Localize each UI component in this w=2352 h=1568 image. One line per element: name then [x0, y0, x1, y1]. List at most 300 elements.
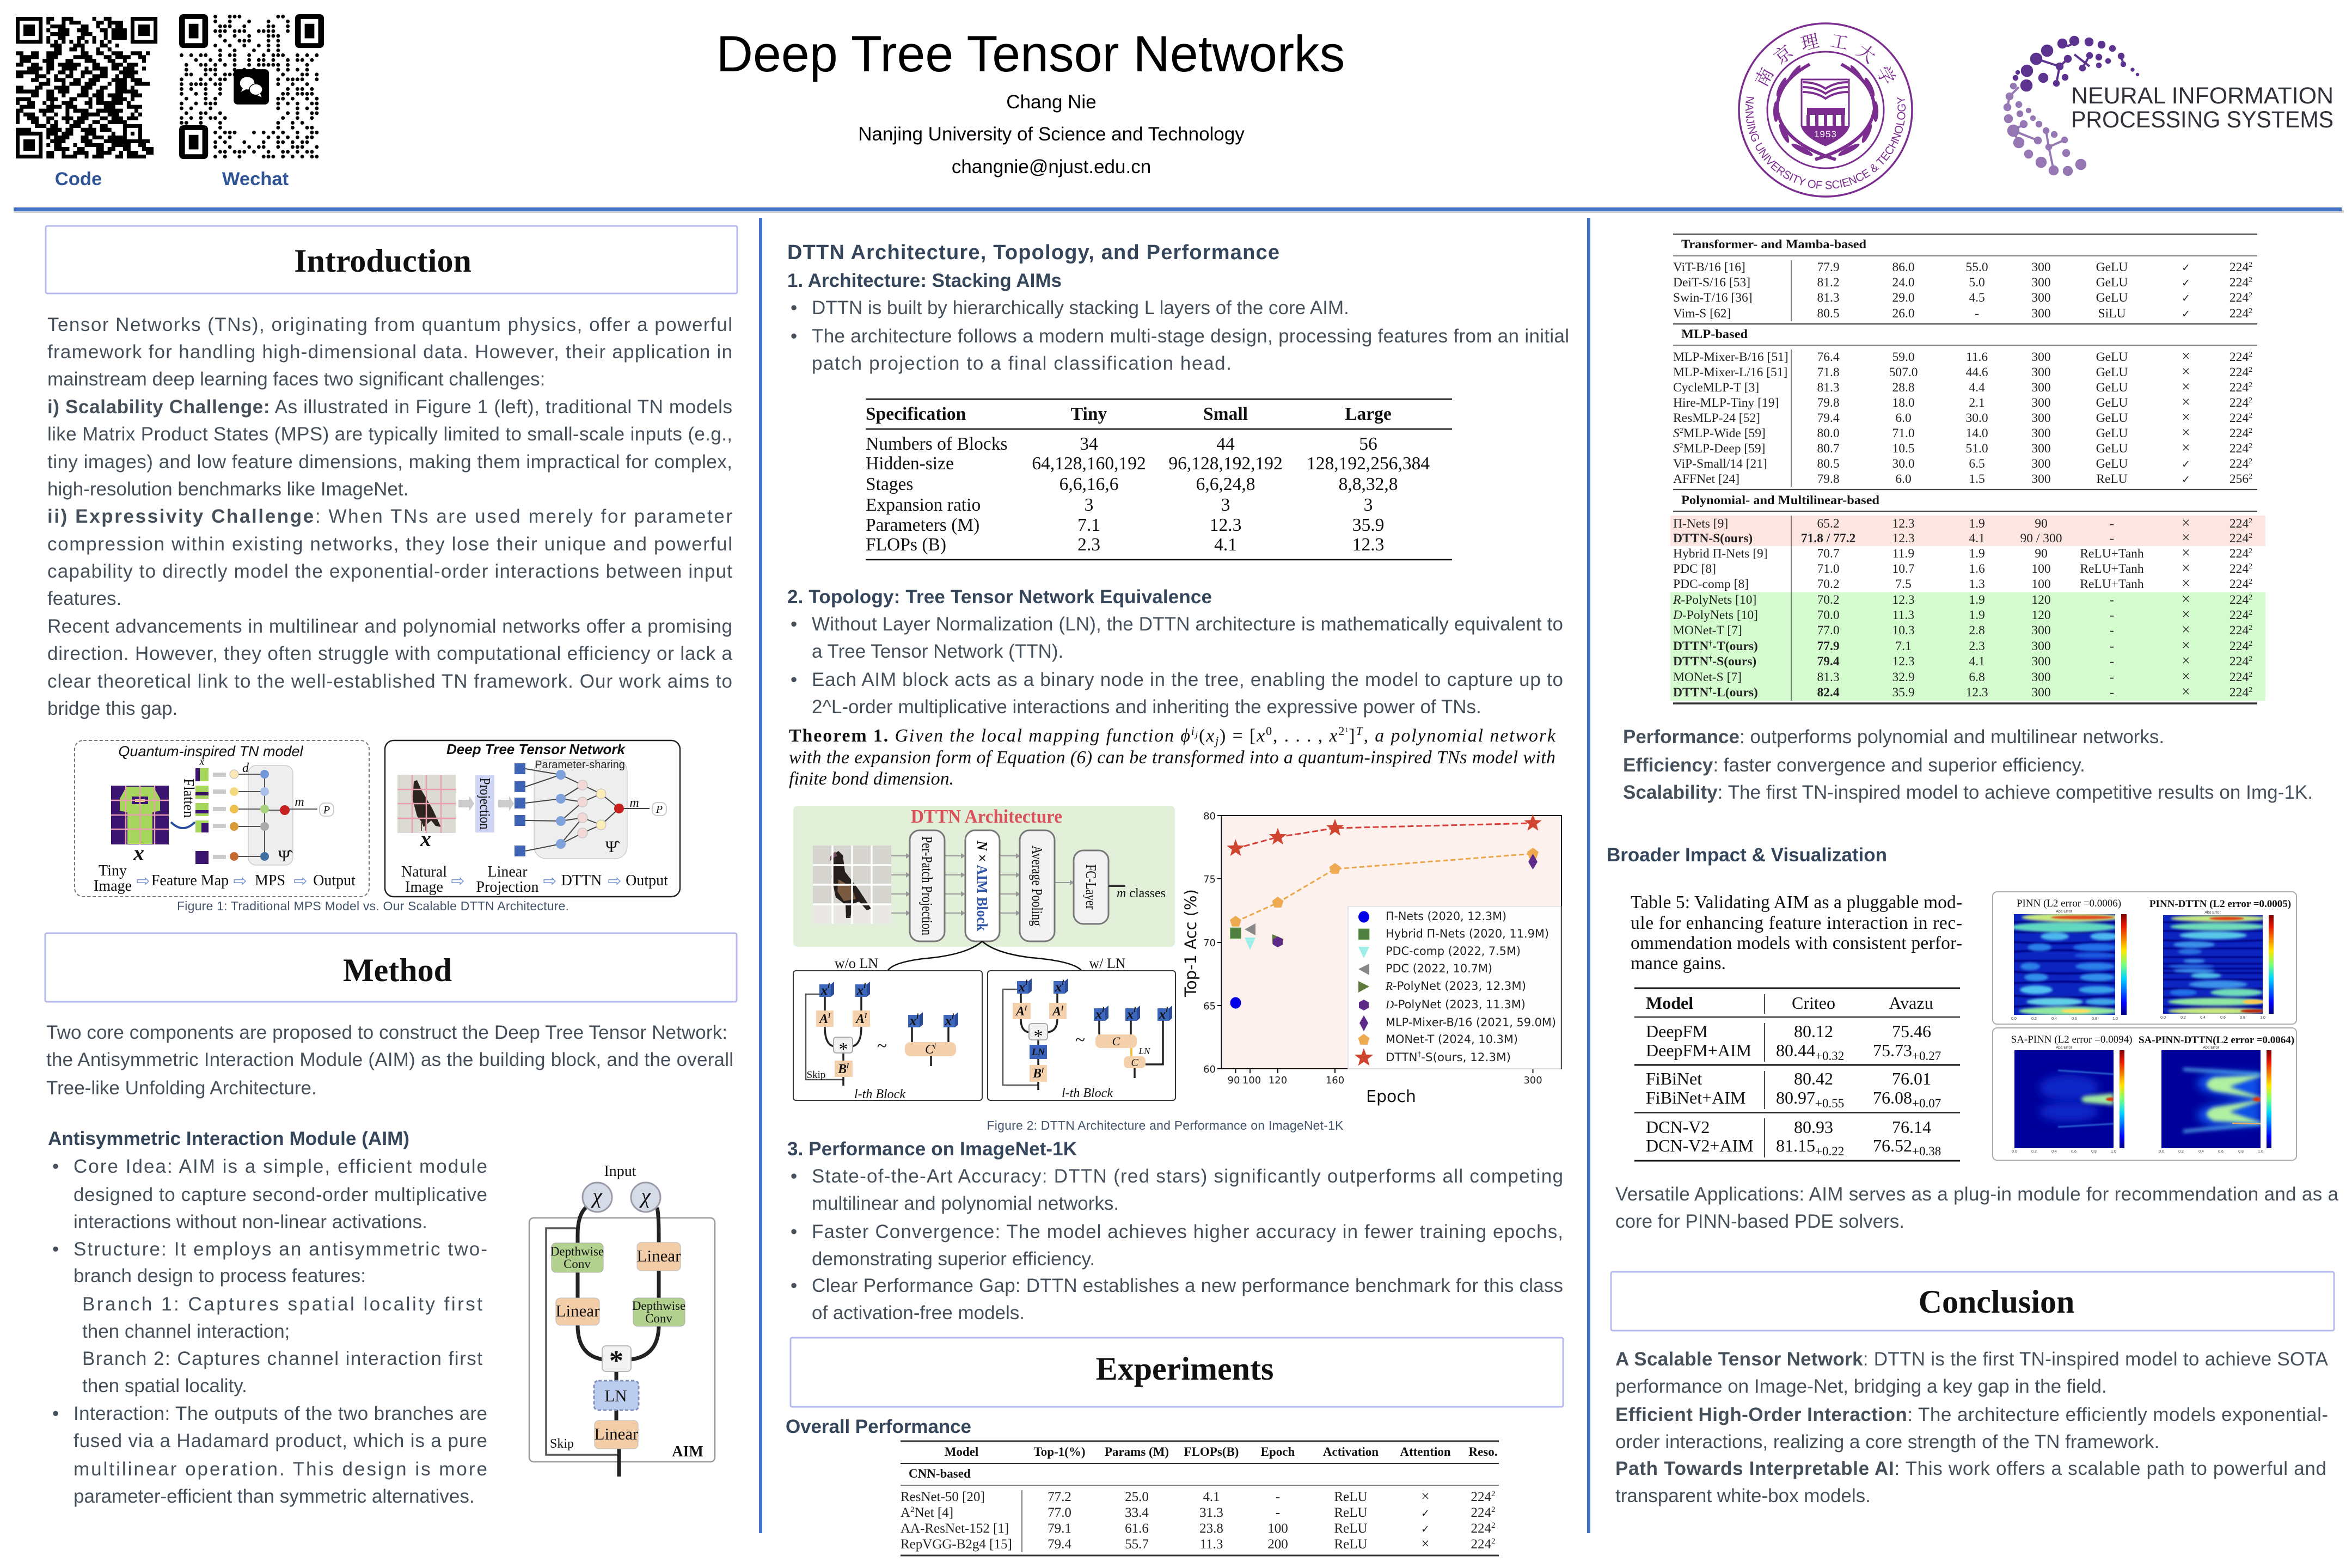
figure 2: accuracy vs epoch chart: 70	[1203, 938, 1216, 949]
table: Transformer, MLP and polynomial results: 2	[1680, 442, 1683, 450]
table: Transformer, MLP and polynomial results: 2	[2249, 532, 2252, 540]
chart legend: Π-Nets (2020, 12.3M)	[1386, 910, 1506, 923]
AIM module diagram: Linear	[595, 1424, 639, 1443]
logo: Neural Information Processing Systems wordmark: NEURAL INFORMATION	[2071, 83, 2333, 109]
figure 1: MPS model panel: Image	[94, 878, 132, 895]
text block: introduction: tiny images) and low feature dimensions, making them impractical for complex,	[47, 451, 732, 473]
table: Transformer, MLP and polynomial results: 10.3	[1892, 623, 1915, 638]
table: Transformer, MLP and polynomial results: -L(ours)	[1712, 685, 1758, 700]
figure 1: Deep Tree Tensor Network panel: Projection	[476, 879, 539, 896]
table: CNN-based results: 77.2	[1048, 1490, 1071, 1504]
table: Transformer, MLP and polynomial results: 224	[2230, 639, 2252, 653]
text block: conclusion: performance on Image-Net, bridging a key gap in the field.	[1615, 1376, 2107, 1397]
table: specification: 2.3	[1077, 535, 1100, 555]
figure 1: MPS model panel: ⇨	[293, 872, 308, 891]
table: Transformer, MLP and polynomial results: 2	[2249, 624, 2252, 632]
text block: Architecture bullets: The architecture follows a modern multi-stage design, processing features from an initial	[812, 326, 1569, 347]
table: Transformer, MLP and polynomial results: 300	[2031, 275, 2051, 290]
table: Transformer, MLP and polynomial results: 1.9	[1969, 608, 1985, 622]
table: CNN-based results: ✓	[1421, 1508, 1430, 1520]
table: Transformer, MLP and polynomial results: †	[1708, 686, 1712, 694]
figure 2: l-th block with LN: C	[1131, 1057, 1138, 1069]
table: Transformer, MLP and polynomial results: MLP-Deep [59]	[1683, 442, 1766, 456]
figure 2: DTTN architecture pipeline: Per-Patch Projection	[919, 836, 935, 935]
table: Transformer, MLP and polynomial results: GeLU	[2096, 457, 2128, 471]
table: specification: 44	[1216, 434, 1235, 454]
table: Transformer, MLP and polynomial results: AFFNet [24]	[1673, 472, 1739, 486]
table: Transformer, MLP and polynomial results: 300	[2031, 411, 2051, 425]
table: specification: Specification	[866, 404, 966, 424]
table: Transformer, MLP and polynomial results: S	[1673, 442, 1680, 456]
table: Transformer, MLP and polynomial results: 7.5	[1895, 577, 1912, 591]
table: Transformer, MLP and polynomial results: 35.9	[1892, 685, 1915, 700]
text block: conclusion: order interactions, realizing a core strength of the TN framework.	[1615, 1431, 2159, 1453]
table: CNN-based results: 79.4	[1048, 1537, 1071, 1552]
table: Transformer, MLP and polynomial results: 77.0	[1817, 623, 1840, 638]
text block: introduction: Tensor Networks (TNs), originating from quantum physics, offer a powerful	[47, 314, 732, 335]
text block: Theorem 1: j	[1214, 734, 1218, 748]
table: Transformer, MLP and polynomial results: 11.3	[1892, 608, 1914, 622]
figure 1: MPS model panel: Tiny	[99, 862, 127, 879]
figure 1: Deep Tree Tensor Network panel: DTTN	[561, 872, 602, 889]
text block: AIM bullets: Branch 2: Captures channel interaction first	[82, 1348, 482, 1369]
logo: Neural Information Processing Systems wordmark	[2071, 83, 2333, 133]
table 5: recommendation models: Avazu	[1889, 993, 1933, 1013]
table: Transformer, MLP and polynomial results: 300	[2031, 457, 2051, 471]
table: Transformer, MLP and polynomial results: ✓	[2182, 458, 2190, 470]
figure 2: accuracy vs epoch chart: 65	[1203, 1001, 1216, 1012]
table: Transformer, MLP and polynomial results: -	[2110, 623, 2114, 638]
text block: AIM bullets: Structure: It employs an antisymmetric two-	[74, 1239, 487, 1260]
table: CNN-based results: 77.0	[1048, 1505, 1071, 1520]
subheading: Architecture: 1. Architecture: Stacking AIMs	[787, 270, 1062, 291]
text block: Theorem 1: , a polynomial network	[1364, 726, 1556, 746]
figure 2: l-th block with LN: l	[1025, 979, 1027, 987]
table: Transformer, MLP and polynomial results: ×	[2182, 378, 2190, 395]
table: Transformer, MLP and polynomial results: 224	[2230, 442, 2252, 456]
table: CNN-based results: 61.6	[1125, 1521, 1149, 1536]
figure 2: DTTN architecture pipeline: N × AIM Block	[974, 840, 990, 931]
table: Transformer, MLP and polynomial results	[1670, 234, 2265, 703]
table: Transformer, MLP and polynomial results: 2.1	[1969, 396, 1985, 410]
table: Transformer, MLP and polynomial results: 2	[2249, 473, 2252, 481]
title: Deep Tree Tensor Networks	[716, 26, 1345, 82]
table: Transformer, MLP and polynomial results: -	[2110, 639, 2114, 653]
table: Transformer, MLP and polynomial results: ×	[2182, 409, 2190, 425]
logo: Nanjing University of Science and Technology emblem	[1738, 22, 1913, 198]
table: Transformer, MLP and polynomial results: 2	[2249, 655, 2252, 663]
table: CNN-based results: 31.3	[1199, 1505, 1223, 1520]
table: Transformer, MLP and polynomial results: 507.0	[1889, 365, 1918, 379]
text block: introduction: ii) Expressivity Challenge: When TNs are used merely for parameter	[47, 506, 732, 527]
table: Transformer, MLP and polynomial results: 100	[2031, 577, 2051, 591]
text block: Topology bullets: a Tree Tensor Network (TTN).	[812, 641, 1063, 662]
text block: Architecture bullets: DTTN is built by hierarchically stacking L layers of the core AIM.	[812, 297, 1349, 318]
table: specification: Stages	[866, 474, 913, 494]
figure 2: l-th block with LN: x	[1055, 980, 1062, 995]
table: Transformer, MLP and polynomial results: -	[2110, 531, 2114, 546]
panel heading: Introduction: Introduction	[294, 243, 471, 279]
table: Transformer, MLP and polynomial results: 5.0	[1969, 275, 1985, 290]
table: Transformer, MLP and polynomial results: 300	[2031, 396, 2051, 410]
table: Transformer, MLP and polynomial results: 224	[2230, 381, 2252, 395]
table: Transformer, MLP and polynomial results: SiLU	[2098, 307, 2126, 321]
text block: introduction: Recent advancements in multilinear and polynomial networks offer a promising	[47, 616, 732, 637]
table: Transformer, MLP and polynomial results: 2	[2249, 381, 2252, 389]
table: Transformer, MLP and polynomial results: 2	[2249, 686, 2252, 694]
table: Transformer, MLP and polynomial results: 80.7	[1817, 442, 1840, 456]
table 5: recommendation models: DCN-V2+AIM	[1646, 1136, 1754, 1155]
table: Transformer, MLP and polynomial results: 51.0	[1965, 442, 1988, 456]
heatmap panel: SA-PINN comparison	[1993, 1028, 2296, 1160]
table: Transformer, MLP and polynomial results: MONet-S [7]	[1673, 670, 1742, 684]
heatmap panel: PINN comparison: 0.0	[2011, 1017, 2017, 1021]
table: Transformer, MLP and polynomial results: 71.8 / 77.2	[1801, 531, 1855, 546]
text block: AIM bullets: interactions without non-linear activations.	[74, 1211, 427, 1233]
heatmap panel: PINN comparison: 0.6	[2072, 1017, 2077, 1021]
text block: introduction: high-resolution benchmarks like ImageNet.	[47, 479, 408, 500]
AIM module diagram: χ	[639, 1184, 651, 1208]
figure 2: l-th block without LN	[793, 971, 982, 1101]
figure 2: l-th block without LN: l	[934, 1043, 936, 1051]
table 5: recommendation models: 76.14	[1892, 1117, 1931, 1137]
text block: Theorem 1: T	[1356, 724, 1363, 738]
author and affiliation: Nanjing University of Science and Technology	[858, 124, 1245, 145]
table: Transformer, MLP and polynomial results: GeLU	[2096, 275, 2128, 290]
table: Transformer, MLP and polynomial results: 70.0	[1817, 608, 1840, 622]
text block: method intro: Two core components are proposed to construct the Deep Tree Tensor Network:	[46, 1022, 727, 1043]
text block: AIM bullets: •	[52, 1239, 59, 1260]
table: specification: 128,192,256,384	[1307, 454, 1430, 474]
logo: Neural Information Processing Systems wordmark: PROCESSING SYSTEMS	[2071, 107, 2333, 133]
figure 2: l-th block without LN: l	[828, 1012, 830, 1020]
table: Transformer, MLP and polynomial results: 10.7	[1892, 562, 1915, 576]
QR code: code repository	[16, 17, 157, 158]
table: specification: Small	[1203, 404, 1248, 424]
table 5: recommendation models	[1634, 988, 1960, 1161]
figure 2: l-th block without LN: l	[865, 1012, 867, 1020]
text block: Topology bullets: •	[791, 669, 797, 690]
text block: introduction: clear theoretical link to the well-established TN framework. Our work aims to	[47, 671, 732, 692]
logo: NeurIPS dotted mark	[2004, 36, 2139, 175]
table: Transformer, MLP and polynomial results: Π-Nets [9]	[1673, 517, 1728, 531]
figure 2: curved connector and branch labels	[835, 941, 1126, 971]
table: Transformer, MLP and polynomial results: 300	[2031, 381, 2051, 395]
table: Transformer, MLP and polynomial results: DTTN-S(ours)	[1673, 531, 1753, 546]
table: Transformer, MLP and polynomial results: 2	[2249, 276, 2252, 284]
heatmap panel: PINN comparison	[1993, 892, 2296, 1024]
table: Transformer, MLP and polynomial results: 2	[2249, 412, 2252, 420]
main heading: column 2: DTTN Architecture, Topology, and Performance	[787, 241, 1279, 264]
table: Transformer, MLP and polynomial results: 30.0	[1892, 457, 1915, 471]
table: CNN-based results	[901, 1441, 1499, 1555]
table: Transformer, MLP and polynomial results: 224	[2230, 260, 2252, 274]
table: CNN-based results: 2	[910, 1505, 915, 1514]
heatmap panel: SA-PINN comparison: Abs Error	[2056, 1046, 2072, 1050]
table: Transformer, MLP and polynomial results: ×	[2182, 529, 2190, 546]
table: CNN-based results: 25.0	[1125, 1490, 1149, 1504]
text block: introduction: bridge this gap.	[47, 698, 177, 719]
table 5: recommendation models: DeepFM	[1646, 1021, 1708, 1041]
figure 1: MPS model panel: x	[199, 756, 205, 768]
figure 1: Deep Tree Tensor Network panel: Projection	[477, 777, 493, 830]
table 5 caption: mance gains.	[1631, 953, 1726, 973]
table: Transformer, MLP and polynomial results: 4.1	[1969, 531, 1985, 546]
table: Transformer, MLP and polynomial results: 300	[2031, 442, 2051, 456]
figure 2: accuracy vs epoch chart: 100	[1242, 1075, 1261, 1086]
figure 1: MPS model panel: ⇨	[136, 872, 150, 891]
table: CNN-based results: Params (M)	[1105, 1445, 1169, 1459]
text block: AIM bullets: Core Idea: AIM is a simple, efficient module	[74, 1156, 487, 1177]
table: CNN-based results: 2	[1491, 1505, 1495, 1514]
table: CNN-based results: 224	[1471, 1505, 1495, 1520]
heatmap panel: SA-PINN comparison: 0.8	[2091, 1150, 2097, 1154]
text block: introduction: features.	[47, 588, 121, 609]
chart legend: Hybrid Π-Nets (2020, 11.9M)	[1386, 927, 1549, 940]
table: Transformer, MLP and polynomial results: Polynomial- and Multilinear-based	[1681, 493, 1879, 507]
table: specification: Numbers of Blocks	[866, 434, 1008, 454]
table: Transformer, MLP and polynomial results: ×	[2182, 575, 2190, 591]
table: Transformer, MLP and polynomial results: -	[2110, 593, 2114, 607]
figure 2: l-th block with LN: *	[1033, 1026, 1043, 1046]
table 5: recommendation models: 76.08	[1873, 1088, 1941, 1110]
figure 2: l-th block with LN: l	[1102, 1006, 1104, 1014]
text block: AIM bullets: branch design to process features:	[74, 1265, 366, 1287]
chart legend: PDC (2022, 10.7M)	[1386, 962, 1492, 975]
table: Transformer, MLP and polynomial results: 2	[2249, 593, 2252, 602]
table: CNN-based results: Reso.	[1468, 1445, 1498, 1459]
text block: Performance bullets	[791, 1166, 1563, 1324]
chart legend: MONet-T (2024, 10.3M)	[1386, 1033, 1518, 1046]
table: CNN-based results: 2	[1491, 1521, 1495, 1530]
table: Transformer, MLP and polynomial results: ×	[2182, 652, 2190, 669]
logo: Nanjing University of Science and Technology emblem: 南京理工大学	[1755, 33, 1896, 87]
text block: Theorem 1: Theorem 1. Given the local mapping function ϕ	[789, 726, 1190, 746]
table 5: recommendation models: +0.32	[1815, 1049, 1844, 1063]
text block: AIM bullets: •	[52, 1156, 59, 1177]
table: Transformer, MLP and polynomial results: 1.9	[1969, 517, 1985, 531]
figure 2: curved connector and branch labels: w/o LN	[835, 955, 878, 971]
figure 2: l-th block with LN: A	[1016, 1004, 1025, 1019]
figure 2: l-th block with LN	[988, 971, 1175, 1100]
text block: AIM bullets: Branch 1: Captures spatial locality first	[82, 1294, 482, 1315]
table: Transformer, MLP and polynomial results: 80.5	[1817, 307, 1840, 321]
text block: Performance bullets: of activation-free models.	[812, 1302, 1025, 1324]
table: Transformer, MLP and polynomial results: ×	[2182, 348, 2190, 364]
figure 2: l-th block without LN: A	[819, 1012, 828, 1026]
figure 2: l-th block without LN: l-th Block	[854, 1087, 905, 1101]
table: Transformer, MLP and polynomial results: 4.1	[1969, 654, 1985, 669]
text block: Architecture bullets: patch projection to a final classification head.	[812, 353, 1232, 374]
text block: Performance bullets: State-of-the-Art Accuracy: DTTN (red stars) significantly outperforms all competing	[812, 1166, 1563, 1187]
figure 2: l-th block without LN: C	[925, 1043, 934, 1057]
figure 2: l-th block without LN: x	[910, 1014, 916, 1028]
table: Transformer, MLP and polynomial results: 71.0	[1892, 426, 1915, 440]
table: Transformer, MLP and polynomial results: 86.0	[1892, 260, 1915, 274]
table: Transformer, MLP and polynomial results: 81.3	[1817, 291, 1840, 305]
table: Transformer, MLP and polynomial results: ReLU	[2096, 472, 2128, 486]
table: Transformer, MLP and polynomial results: 224	[2230, 291, 2252, 305]
subheading: Broader Impact: Broader Impact & Visualization	[1607, 844, 1887, 866]
heatmap panel: PINN comparison: 0.6	[2220, 1016, 2226, 1020]
table: Transformer, MLP and polynomial results: 6.5	[1969, 457, 1985, 471]
text block: AIM bullets: parameter-efficient than symmetric alternatives.	[74, 1486, 475, 1507]
AIM module diagram: Skip	[550, 1437, 574, 1451]
table: Transformer, MLP and polynomial results: 120	[2031, 608, 2051, 622]
table: CNN-based results: AA-ResNet-152 [1]	[901, 1521, 1009, 1536]
figure 1: Deep Tree Tensor Network panel: Deep Tree Tensor Network	[446, 741, 626, 757]
figure 2: l-th block without LN: l	[916, 1013, 918, 1021]
table: Transformer, MLP and polynomial results: 120	[2031, 593, 2051, 607]
table: Transformer, MLP and polynomial results: 81.2	[1817, 275, 1840, 290]
table: Transformer, MLP and polynomial results: 300	[2031, 639, 2051, 653]
table: Transformer, MLP and polynomial results: 65.2	[1817, 517, 1840, 531]
figure 2: DTTN architecture pipeline: Average Pooling	[1029, 846, 1045, 926]
text block: Theorem 1: 2ᵗ	[1338, 724, 1347, 738]
figure 2: l-th block with LN: LN	[1031, 1046, 1045, 1057]
table: Transformer, MLP and polynomial results: R-PolyNets [10]	[1673, 593, 1756, 607]
table: specification: Hidden-size	[866, 454, 954, 474]
table: Transformer, MLP and polynomial results: 12.3	[1965, 685, 1988, 700]
table 5 caption: Table 5: Validating AIM as a pluggable mod-	[1631, 892, 1962, 912]
table: Transformer, MLP and polynomial results: 2	[2249, 351, 2252, 359]
table: Transformer, MLP and polynomial results: 224	[2230, 426, 2252, 440]
table: Transformer, MLP and polynomial results: 90	[2035, 547, 2048, 561]
text block: introduction: direction. However, they often struggle with computational efficiency or lack a	[47, 643, 733, 664]
heatmap panel: PINN comparison: 0.4	[2200, 1016, 2206, 1020]
figure 1: Deep Tree Tensor Network panel: Natural	[401, 863, 447, 880]
text block: Topology bullets	[791, 614, 1563, 718]
figure 2: l-th block without LN: A	[856, 1012, 865, 1026]
table: Transformer, MLP and polynomial results: 1.6	[1969, 562, 1985, 576]
table: Transformer, MLP and polynomial results: CycleMLP-T [3]	[1673, 381, 1759, 395]
AIM module diagram: χ	[590, 1184, 603, 1208]
figure 2: accuracy vs epoch chart: 160	[1326, 1075, 1344, 1086]
logo: Nanjing University of Science and Technology emblem: NANJING UNIVERSITY OF SCIENCE & TECHNOLOGY	[1745, 97, 1906, 189]
table: Transformer, MLP and polynomial results: 90	[2035, 517, 2048, 531]
subheading: Performance: 3. Performance on ImageNet-1K	[787, 1138, 1077, 1160]
table: CNN-based results: CNN-based	[909, 1467, 971, 1480]
table: Transformer, MLP and polynomial results: 224	[2230, 275, 2252, 290]
table: CNN-based results: 79.1	[1048, 1521, 1071, 1536]
table: Transformer, MLP and polynomial results: †	[1708, 640, 1712, 648]
table 5: recommendation models: 80.97	[1776, 1088, 1844, 1110]
text block: Theorem 1: ]	[1349, 726, 1355, 746]
figure 2: DTTN architecture pipeline: m classes	[1117, 886, 1166, 901]
text block: Theorem 1: with the expansion form of Equation (6) can be transformed into a quantum-inspired TNs model with	[789, 748, 1555, 768]
table 5: recommendation models: 76.52	[1873, 1136, 1941, 1158]
table: Transformer, MLP and polynomial results: 300	[2031, 472, 2051, 486]
table 5: recommendation models: +0.22	[1815, 1144, 1844, 1158]
table: CNN-based results: ×	[1421, 1488, 1430, 1504]
table: Transformer, MLP and polynomial results: ReLU+Tanh	[2080, 577, 2144, 591]
text block: conclusion: A Scalable Tensor Network: DTTN is the first TN-inspired model to achieve SOTA	[1615, 1349, 2329, 1370]
table: Transformer, MLP and polynomial results: 12.3	[1892, 531, 1915, 546]
table: Transformer, MLP and polynomial results: -	[2110, 608, 2114, 622]
table: Transformer, MLP and polynomial results: GeLU	[2096, 260, 2128, 274]
figure 2: l-th block with LN: x	[1095, 1007, 1102, 1022]
table: Transformer, MLP and polynomial results: -	[2110, 654, 2114, 669]
figure 2: l-th block with LN: LN	[1138, 1046, 1151, 1056]
subheading: Topology: 2. Topology: Tree Tensor Network Equivalence	[787, 586, 1212, 608]
subheading: Overall Performance: Overall Performance	[786, 1416, 971, 1437]
table: Transformer, MLP and polynomial results: 77.9	[1817, 260, 1840, 274]
heatmap panel: SA-PINN comparison: 1.0	[2258, 1150, 2263, 1154]
table: Transformer, MLP and polynomial results: 80.5	[1817, 457, 1840, 471]
table: Transformer, MLP and polynomial results: Hybrid Π-Nets [9]	[1673, 547, 1768, 561]
table: Transformer, MLP and polynomial results: 79.4	[1817, 411, 1840, 425]
figure 2: l-th block with LN: x	[1019, 980, 1025, 995]
text block: Topology bullets: •	[791, 614, 797, 635]
table: CNN-based results: 2	[1491, 1537, 1495, 1546]
table: Transformer, MLP and polynomial results: 29.0	[1892, 291, 1915, 305]
table: Transformer, MLP and polynomial results: †	[1708, 655, 1712, 663]
figure 1: MPS model panel: Quantum-inspired TN model	[118, 743, 304, 759]
text block: Performance bullets: •	[791, 1275, 797, 1296]
table: specification: Parameters (M)	[866, 515, 979, 535]
table 5: recommendation models: +0.38	[1912, 1144, 1941, 1158]
table 5: recommendation models: FiBiNet	[1646, 1069, 1702, 1088]
heatmap panel: PINN comparison: Abs Error	[2056, 910, 2072, 914]
text block: performance summary: Performance: outperforms polynomial and multilinear networks.	[1623, 726, 2164, 748]
figure 2: l-th block without LN: l	[828, 982, 830, 990]
chart legend: D-PolyNet (2023, 11.3M)	[1385, 998, 1526, 1011]
heatmap panel: SA-PINN comparison: 0.0	[2012, 1150, 2017, 1154]
figure 1: MPS model panel: Flatten	[181, 779, 197, 818]
table: Transformer, MLP and polynomial results: ✓	[2182, 474, 2190, 486]
figure 1: Deep Tree Tensor Network panel	[385, 740, 680, 897]
table: Transformer, MLP and polynomial results: 6.8	[1969, 670, 1985, 684]
text block: Performance bullets: Faster Convergence: The model achieves higher accuracy in fewer training epochs,	[812, 1221, 1563, 1242]
table: Transformer, MLP and polynomial results: GeLU	[2096, 350, 2128, 364]
table: Transformer, MLP and polynomial results: 2	[2249, 562, 2252, 571]
table: Transformer, MLP and polynomial results: 70.2	[1817, 593, 1840, 607]
table: Transformer, MLP and polynomial results: 224	[2230, 307, 2252, 321]
AIM module diagram: Conv	[564, 1257, 591, 1271]
text block: AIM bullets: then spatial locality.	[82, 1375, 247, 1396]
text block: versatile applications: Versatile Applications: AIM serves as a plug-in module for recommendation and as a	[1615, 1184, 2339, 1205]
table: Transformer, MLP and polynomial results: 28.8	[1892, 381, 1915, 395]
text block: Theorem 1: i	[1191, 724, 1195, 738]
table: Transformer, MLP and polynomial results: 224	[2230, 517, 2252, 531]
table: Transformer, MLP and polynomial results: ×	[2182, 683, 2190, 700]
chart legend	[1348, 906, 1561, 1069]
figure 2: accuracy vs epoch chart	[1181, 811, 1561, 1106]
text block: performance summary: Scalability: The first TN-inspired model to achieve competitive results on Img-1K.	[1623, 782, 2313, 803]
subheading: AIM: Antisymmetric Interaction Module (AIM)	[48, 1128, 409, 1149]
table: Transformer, MLP and polynomial results: 224	[2230, 396, 2252, 410]
table: Transformer, MLP and polynomial results: GeLU	[2096, 381, 2128, 395]
text block: performance summary	[1623, 726, 2313, 803]
heatmap panel: PINN comparison: 0.0	[2160, 1016, 2166, 1020]
table: Transformer, MLP and polynomial results: -S(ours)	[1712, 654, 1756, 669]
table: Transformer, MLP and polynomial results: 55.0	[1965, 260, 1988, 274]
table: Transformer, MLP and polynomial results: 2	[2249, 517, 2252, 525]
figure 1: Deep Tree Tensor Network panel: Linear	[487, 863, 528, 880]
heatmap panel: SA-PINN comparison: 0.4	[2051, 1150, 2057, 1154]
table: CNN-based results: Activation	[1323, 1445, 1379, 1459]
AIM module diagram: Depthwise	[632, 1299, 685, 1313]
author and affiliation	[858, 91, 1245, 177]
table: CNN-based results: Top-1(%)	[1033, 1445, 1086, 1459]
text block: introduction: i) Scalability Challenge: As illustrated in Figure 1 (left), traditional TN models	[47, 396, 732, 418]
table: Transformer, MLP and polynomial results: 26.0	[1892, 307, 1915, 321]
table: CNN-based results: RepVGG-B2g4 [15]	[901, 1537, 1012, 1552]
heatmap panel: PINN comparison: Abs Error	[2204, 911, 2221, 915]
figure 2: accuracy vs epoch chart: 120	[1269, 1075, 1287, 1086]
chart legend: †	[1417, 1051, 1422, 1059]
table: Transformer, MLP and polynomial results: GeLU	[2096, 442, 2128, 456]
